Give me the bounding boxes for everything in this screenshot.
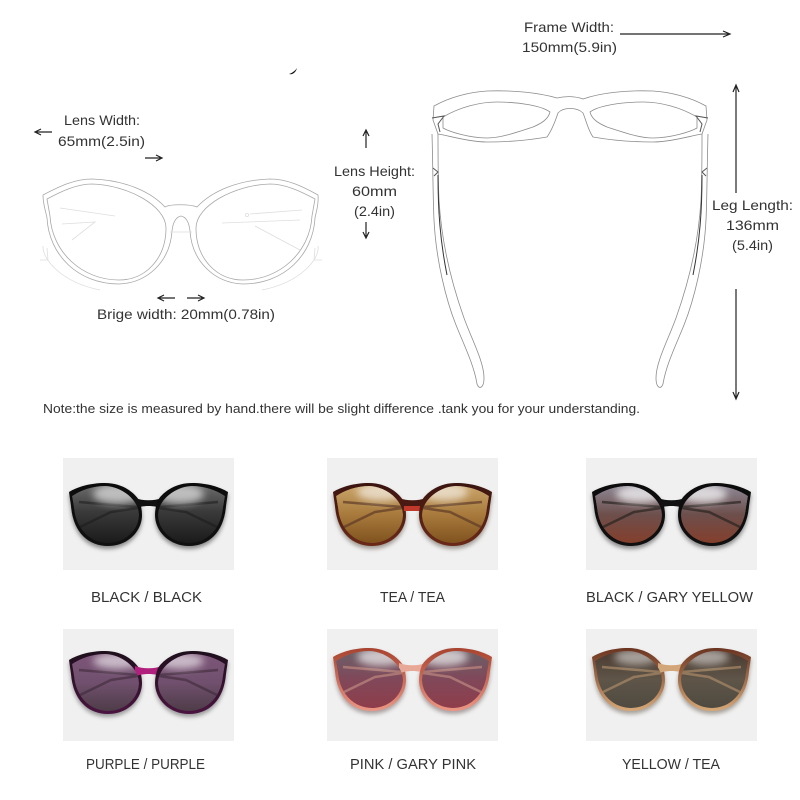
label: bridge width: Brige width: 20mm(0.78in) [97, 306, 275, 322]
label: black / black: BLACK / BLACK [91, 589, 202, 606]
label: tea / tea: TEA / TEA [380, 589, 445, 606]
sunglasses: black [69, 483, 228, 546]
label: lens width: 65mm(2.5in) [58, 133, 145, 149]
sunglasses: pink [333, 648, 492, 711]
label: frame width: 150mm(5.9in) [522, 39, 617, 55]
panel: top view size diagram [432, 19, 793, 399]
arrow: leg length up [733, 85, 739, 193]
label: leg length [712, 197, 793, 253]
label: black / gary yellow: BLACK / GARY YELLOW [586, 589, 754, 606]
panel: front view size diagram [35, 112, 415, 322]
panel: pink / gary pink [327, 629, 498, 741]
arrow: lens height up [363, 130, 369, 148]
label: lens width [58, 112, 145, 149]
label: frame width: Frame Width: [524, 19, 614, 35]
label: leg length: (5.4in) [732, 237, 773, 253]
label: lens width: Lens Width: [64, 112, 140, 128]
label: lens height: Lens Height: [334, 163, 415, 179]
sunglasses: tea [333, 483, 492, 546]
label: purple / purple: PURPLE / PURPLE [86, 756, 205, 773]
arrow: frame width [620, 31, 730, 37]
label: leg length: Leg Length: [712, 197, 793, 213]
label: lens height: 60mm [352, 183, 397, 199]
sunglasses: purple [69, 651, 228, 714]
arrow: lens width right [145, 155, 162, 161]
panel: tea / tea [327, 458, 498, 570]
panel: purple / purple [63, 629, 234, 741]
sunglasses: yellow [592, 648, 751, 711]
arrow: leg length down [733, 289, 739, 399]
arrow: lens height down [363, 222, 369, 238]
label: yellow / tea: YELLOW / TEA [622, 756, 720, 773]
label: leg length: 136mm [726, 217, 779, 233]
arrow: bridge width left [158, 295, 175, 301]
label: lens height [334, 163, 415, 219]
sunglasses: black with gradient lens [592, 483, 751, 546]
sketch: top view of glasses [432, 91, 708, 387]
decorative speck: small black tick [289, 68, 297, 74]
label: pink / gary pink: PINK / GARY PINK [350, 756, 476, 773]
label: lens height: (2.4in) [354, 203, 395, 219]
label: frame width [522, 19, 617, 55]
note: Note:the size is measured by hand.there will be slight difference .tank you for your understanding. [43, 401, 640, 416]
arrow: bridge width right [187, 295, 204, 301]
sketch: front view of glasses [40, 179, 322, 290]
arrow: lens width left [35, 129, 52, 135]
panel: black / black [63, 458, 234, 570]
panel: yellow / tea [586, 629, 757, 741]
panel: black / gary yellow [586, 458, 757, 570]
